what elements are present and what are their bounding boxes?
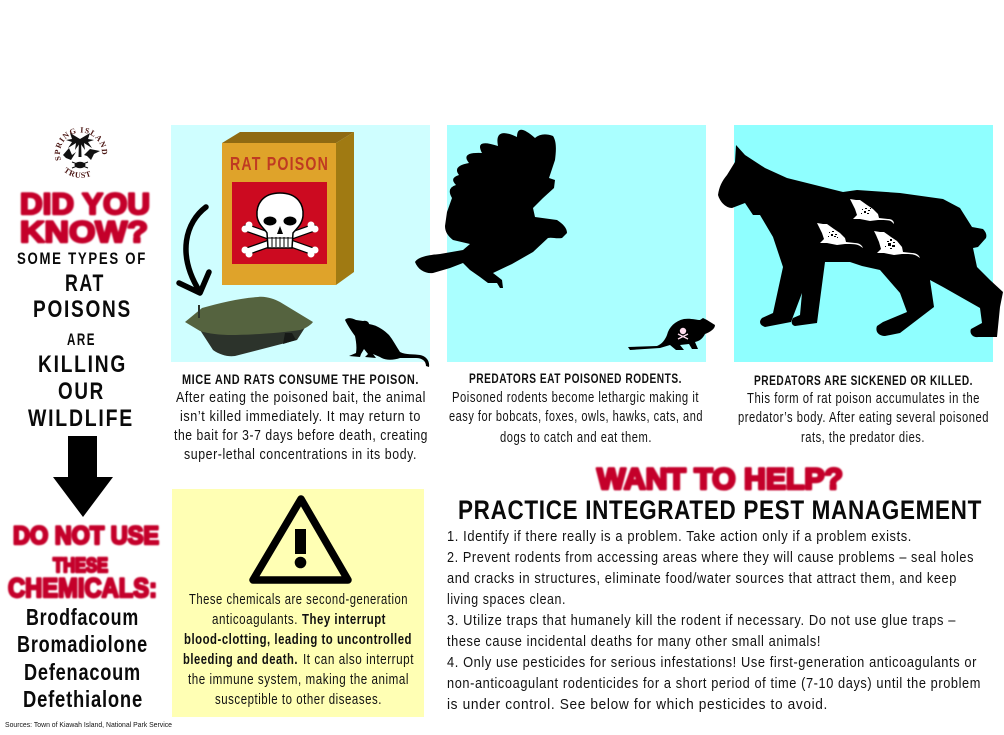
list: integrated pest management steps: these cause incidental deaths for many other small animals! <box>447 633 821 650</box>
caption: predators eat <box>449 371 703 446</box>
icon: warning triangle <box>253 499 348 580</box>
logo: Spring Island Trust: TRUST <box>64 167 90 178</box>
list: chemicals: Defethialone <box>23 686 143 712</box>
text block: warning: bleeding and death. <box>183 651 298 668</box>
caption: mice and rats: the bait for 3-7 days before death, creating <box>174 427 428 444</box>
heading: Did you know: DID YOU <box>20 188 150 221</box>
panel: warning about second-generation anticoagulants <box>172 489 424 717</box>
panel: predators sickened or killed <box>718 125 1003 362</box>
caption: predators eat: easy for bobcats, foxes, owls, hawks, cats, and <box>449 408 703 425</box>
logo: Spring Island Trust: SPRING ISLAND <box>54 127 108 160</box>
text block: some types of rat poisons are killing our wildlife: KILLING <box>38 351 127 378</box>
caption: predators eat: PREDATORS EAT POISONED RODENTS. <box>469 371 682 386</box>
text block: warning: the immune system, making the animal <box>188 671 409 688</box>
list: integrated pest management steps: living spaces clean. <box>447 591 566 608</box>
list: chemicals <box>17 604 148 712</box>
panel: mice and rats consume poison <box>171 125 430 367</box>
icon: hawk silhouette <box>415 130 567 288</box>
caption: mice and rats: super-lethal concentrations in its body. <box>184 446 417 463</box>
icon: poisoned rat <box>628 318 715 350</box>
caption: predators eat: Poisoned rodents become lethargic making it <box>452 389 699 406</box>
text block: some types of rat poisons are killing our wildlife: WILDLIFE <box>28 405 134 432</box>
caption: mice and rats: After eating the poisoned bait, the animal <box>176 389 426 406</box>
text block: some types of rat poisons are killing our wildlife: ARE <box>67 330 96 349</box>
text block: some types of rat poisons are killing our wildlife: POISONS <box>33 296 132 323</box>
heading: do not use these chemicals <box>8 522 159 603</box>
text block: warning: They interrupt <box>302 611 386 628</box>
icon: rat poison box: RAT POISON <box>230 154 329 174</box>
icon: skull and crossbones <box>242 193 318 258</box>
text block: some types of rat poisons are killing our wildlife: OUR <box>58 378 105 405</box>
arrow: down <box>53 436 113 517</box>
logo: Spring Island Trust <box>54 127 108 178</box>
caption: mice and rats: isn’t killed immediately. It may return to <box>180 408 421 425</box>
caption: mice and rats: MICE AND RATS CONSUME THE POISON. <box>182 372 419 387</box>
text block: some types of rat poisons are killing our wildlife: SOME TYPES OF <box>17 249 147 268</box>
caption: predators eat: dogs to catch and eat them. <box>500 429 652 446</box>
caption: predators sickened: rats, the predator dies. <box>801 429 925 446</box>
caption: mice and rats <box>174 372 428 463</box>
caption: predators sickened <box>738 373 989 446</box>
text block: warning: anticoagulants. <box>212 611 298 628</box>
text block: warning: These chemicals are second-generation <box>189 591 408 608</box>
icon: white rat 2 <box>817 223 863 248</box>
text block: some types of rat poisons are killing our wildlife <box>17 249 147 432</box>
text block: warning: It can also interrupt <box>303 651 414 668</box>
icon: bobcat silhouette <box>718 145 1003 337</box>
icon: rat poison box <box>222 132 354 285</box>
text block: warning <box>183 591 414 708</box>
list: integrated pest management steps <box>447 528 981 713</box>
heading: Did you know <box>20 188 150 249</box>
list: chemicals: Brodfacoum <box>26 604 139 630</box>
list: integrated pest management steps: 1. Identify if there really is a problem. Take action only if a problem exists. <box>447 528 912 545</box>
icon: rat silhouette <box>345 318 429 367</box>
heading: Did you know: KNOW? <box>20 216 148 249</box>
panel: predators eat poisoned rodents <box>415 125 715 362</box>
list: chemicals: Defenacoum <box>24 659 141 685</box>
text block: some types of rat poisons are killing our wildlife: RAT <box>65 270 105 297</box>
heading: want to help: WANT TO HELP? <box>597 463 843 496</box>
heading: do not use these chemicals: DO NOT USE <box>13 522 159 550</box>
icon: white rat 1 <box>850 199 894 224</box>
text block: warning: susceptible to other diseases. <box>215 691 382 708</box>
source note: Sources: Town of Kiawah Island, National Park Service <box>5 720 172 729</box>
heading: do not use these chemicals: CHEMICALS: <box>8 573 157 603</box>
icon: bait station <box>185 297 313 356</box>
arrow: curved from box to bait station <box>179 207 209 293</box>
icon: white rat 3 <box>874 231 920 258</box>
list: chemicals: Bromadiolone <box>17 631 148 657</box>
list: integrated pest management steps: is under control. See below for which pesticides to avoid. <box>447 696 828 713</box>
text block: warning: blood-clotting, leading to uncontrolled <box>184 631 412 648</box>
heading: do not use these chemicals: THESE <box>53 555 108 577</box>
